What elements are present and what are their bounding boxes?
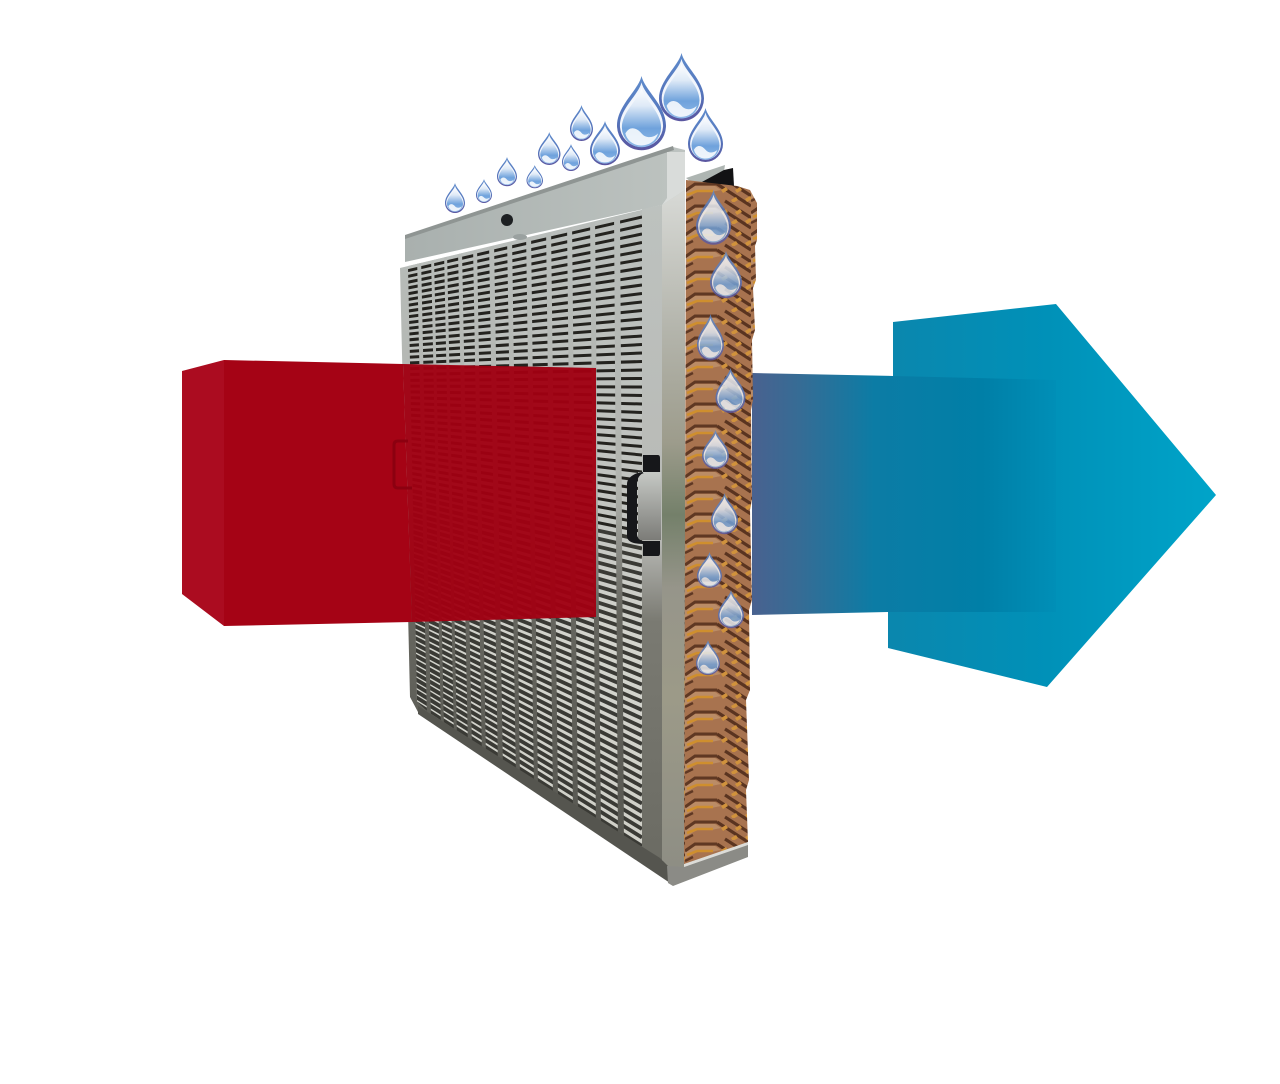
top rail	[405, 146, 685, 262]
pad droplet f	[711, 493, 738, 534]
pad droplet h	[718, 590, 744, 628]
pad droplet a	[696, 190, 731, 245]
door handle	[627, 455, 661, 556]
brown evaporative media pad	[684, 180, 757, 866]
red block front face, over panel	[403, 364, 596, 622]
droplet 11	[688, 108, 723, 162]
water droplets above the unit	[445, 53, 723, 213]
pad droplet i	[696, 640, 720, 675]
droplet 2	[476, 179, 492, 203]
water droplets running down the pad	[696, 190, 746, 675]
panel face with louvers	[400, 175, 685, 868]
inner stile	[642, 205, 662, 866]
droplet 9	[617, 76, 666, 150]
outer stile	[662, 175, 685, 868]
bottom rail	[418, 706, 748, 886]
droplet 6	[562, 144, 580, 171]
cooling pad unit	[400, 146, 757, 886]
pad droplet g	[697, 552, 722, 588]
droplet 3	[497, 157, 517, 186]
pad droplet c	[697, 314, 724, 360]
pad droplet d	[716, 368, 746, 413]
pad droplet e	[702, 430, 729, 469]
ghost handle seen through red	[394, 441, 412, 488]
droplet 7	[570, 105, 593, 141]
pad droplet b	[710, 251, 742, 298]
blue outgoing air arrow	[752, 304, 1216, 687]
red incoming hot air block	[182, 360, 596, 626]
droplet 8	[590, 121, 620, 165]
droplet 5	[538, 132, 560, 165]
droplet 10	[659, 53, 704, 121]
red block front face, over white	[224, 360, 412, 626]
bottom edge highlight	[684, 842, 748, 867]
droplet 4	[526, 165, 543, 188]
droplet 1	[445, 183, 465, 213]
red block side face	[182, 360, 224, 626]
top mount of pad	[686, 165, 734, 186]
